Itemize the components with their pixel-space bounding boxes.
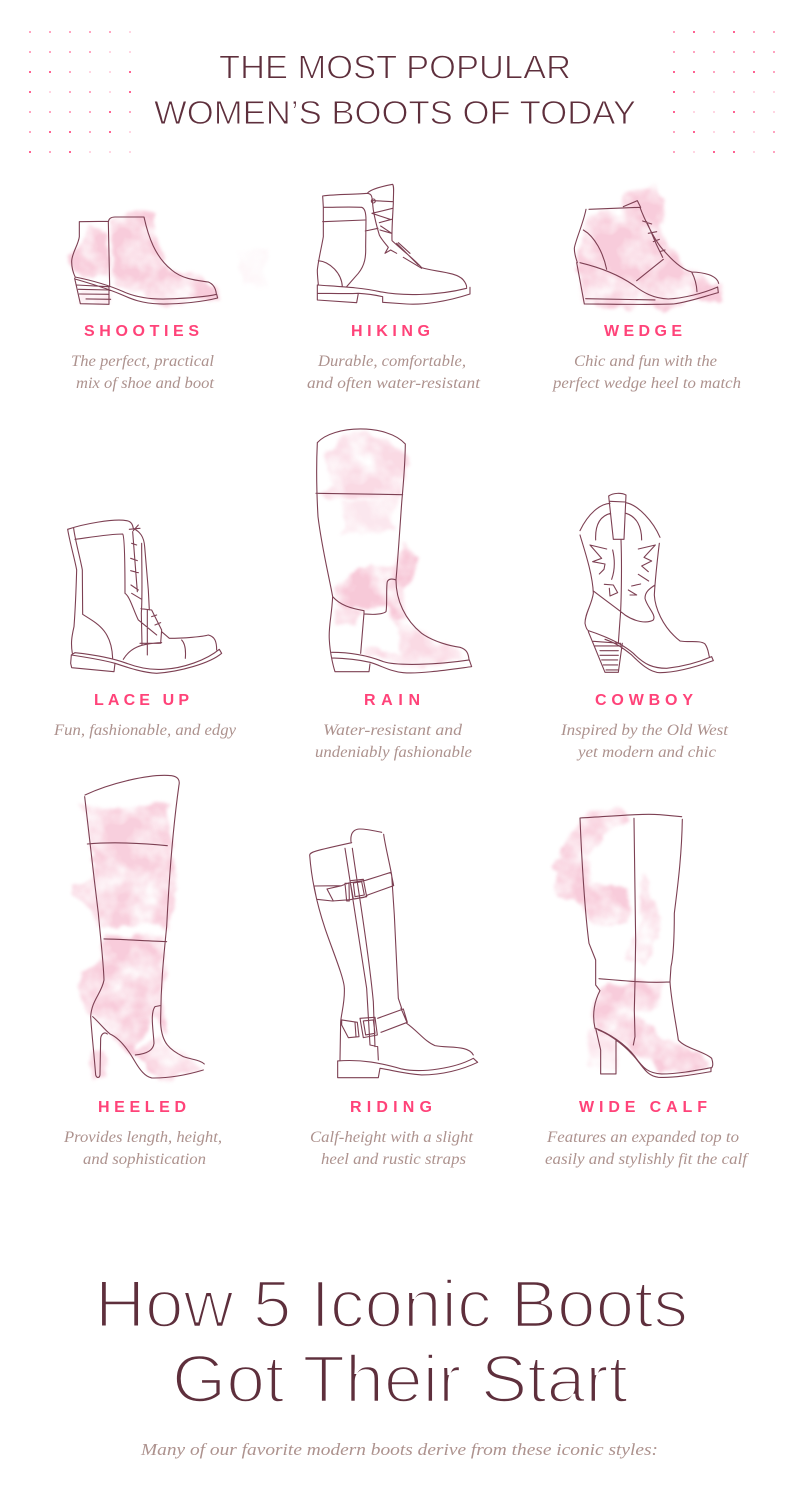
label: rain: RAIN: [364, 692, 420, 709]
boot illustration: wedge: [574, 185, 719, 308]
card: riding: [310, 829, 478, 1168]
description: cowboy: [560, 722, 729, 761]
label: lace up: LACE UP: [94, 692, 189, 709]
decorative dot grid: left: [29, 31, 131, 153]
description: riding: Calf-height with a slight: [310, 1129, 474, 1146]
description: hiking: Durable, comfortable,: [317, 353, 466, 370]
card: cowboy: [560, 493, 729, 761]
card: rain: [315, 429, 472, 761]
label: cowboy: COWBOY: [595, 692, 693, 709]
boot illustration: hiking: [317, 184, 470, 304]
card: wedge: [552, 185, 741, 392]
label: wide calf: WIDE CALF: [579, 1099, 707, 1116]
boot illustration: heeled: [75, 775, 204, 1078]
label: hiking: HIKING: [351, 323, 430, 340]
section heading: [95, 1267, 688, 1417]
boot illustration: rain: [316, 429, 472, 673]
boot illustration: lace up: [68, 520, 222, 673]
description: wedge: [552, 353, 741, 392]
description: wedge: perfect wedge heel to match: [552, 375, 741, 392]
description: cowboy: yet modern and chic: [576, 744, 716, 761]
section heading: How 5 Iconic Boots: [95, 1267, 688, 1342]
intro text: Many of our favorite modern boots derive from these iconic styles:: [140, 1440, 658, 1459]
description: wedge: Chic and fun with the: [574, 353, 717, 370]
title: [154, 48, 636, 131]
boot illustration: wide calf: [557, 810, 713, 1077]
card: heeled: [63, 775, 222, 1168]
description: lace up: Fun, fashionable, and edgy: [53, 722, 237, 739]
description: rain: [315, 722, 472, 761]
title: WOMEN’S BOOTS OF TODAY: [154, 94, 636, 131]
description: heeled: [63, 1129, 222, 1168]
card: wide calf: [545, 810, 750, 1168]
description: riding: heel and rustic straps: [321, 1151, 466, 1168]
description: hiking: and often water-resistant: [307, 375, 481, 392]
description: cowboy: Inspired by the Old West: [560, 722, 729, 739]
label: shooties: SHOOTIES: [84, 323, 199, 340]
title: THE MOST POPULAR: [219, 48, 571, 86]
card: lace up: [53, 520, 237, 739]
description: shooties: mix of shoe and boot: [76, 375, 215, 392]
description: wide calf: easily and stylishly fit the calf: [545, 1151, 750, 1168]
boot illustration: riding: [310, 829, 478, 1078]
boot illustration: cowboy: [580, 493, 713, 673]
card: shooties: [68, 212, 267, 392]
label: riding: RIDING: [350, 1099, 432, 1116]
description: wide calf: Features an expanded top to: [546, 1129, 739, 1146]
label: heeled: HEELED: [98, 1099, 186, 1116]
description: riding: [310, 1129, 474, 1168]
boot illustration: shooties: [68, 212, 267, 305]
description: shooties: The perfect, practical: [71, 353, 215, 370]
card: hiking: [307, 184, 481, 392]
description: heeled: Provides length, height,: [63, 1129, 222, 1146]
description: shooties: [71, 353, 215, 392]
description: hiking: [307, 353, 481, 392]
decorative dot grid: right: [673, 31, 775, 153]
description: wide calf: [545, 1129, 750, 1168]
section heading: Got Their Start: [172, 1342, 628, 1417]
description: heeled: and sophistication: [83, 1151, 206, 1168]
label: wedge: WEDGE: [604, 323, 682, 340]
description: rain: Water-resistant and: [323, 722, 463, 739]
description: rain: undeniably fashionable: [315, 744, 472, 761]
